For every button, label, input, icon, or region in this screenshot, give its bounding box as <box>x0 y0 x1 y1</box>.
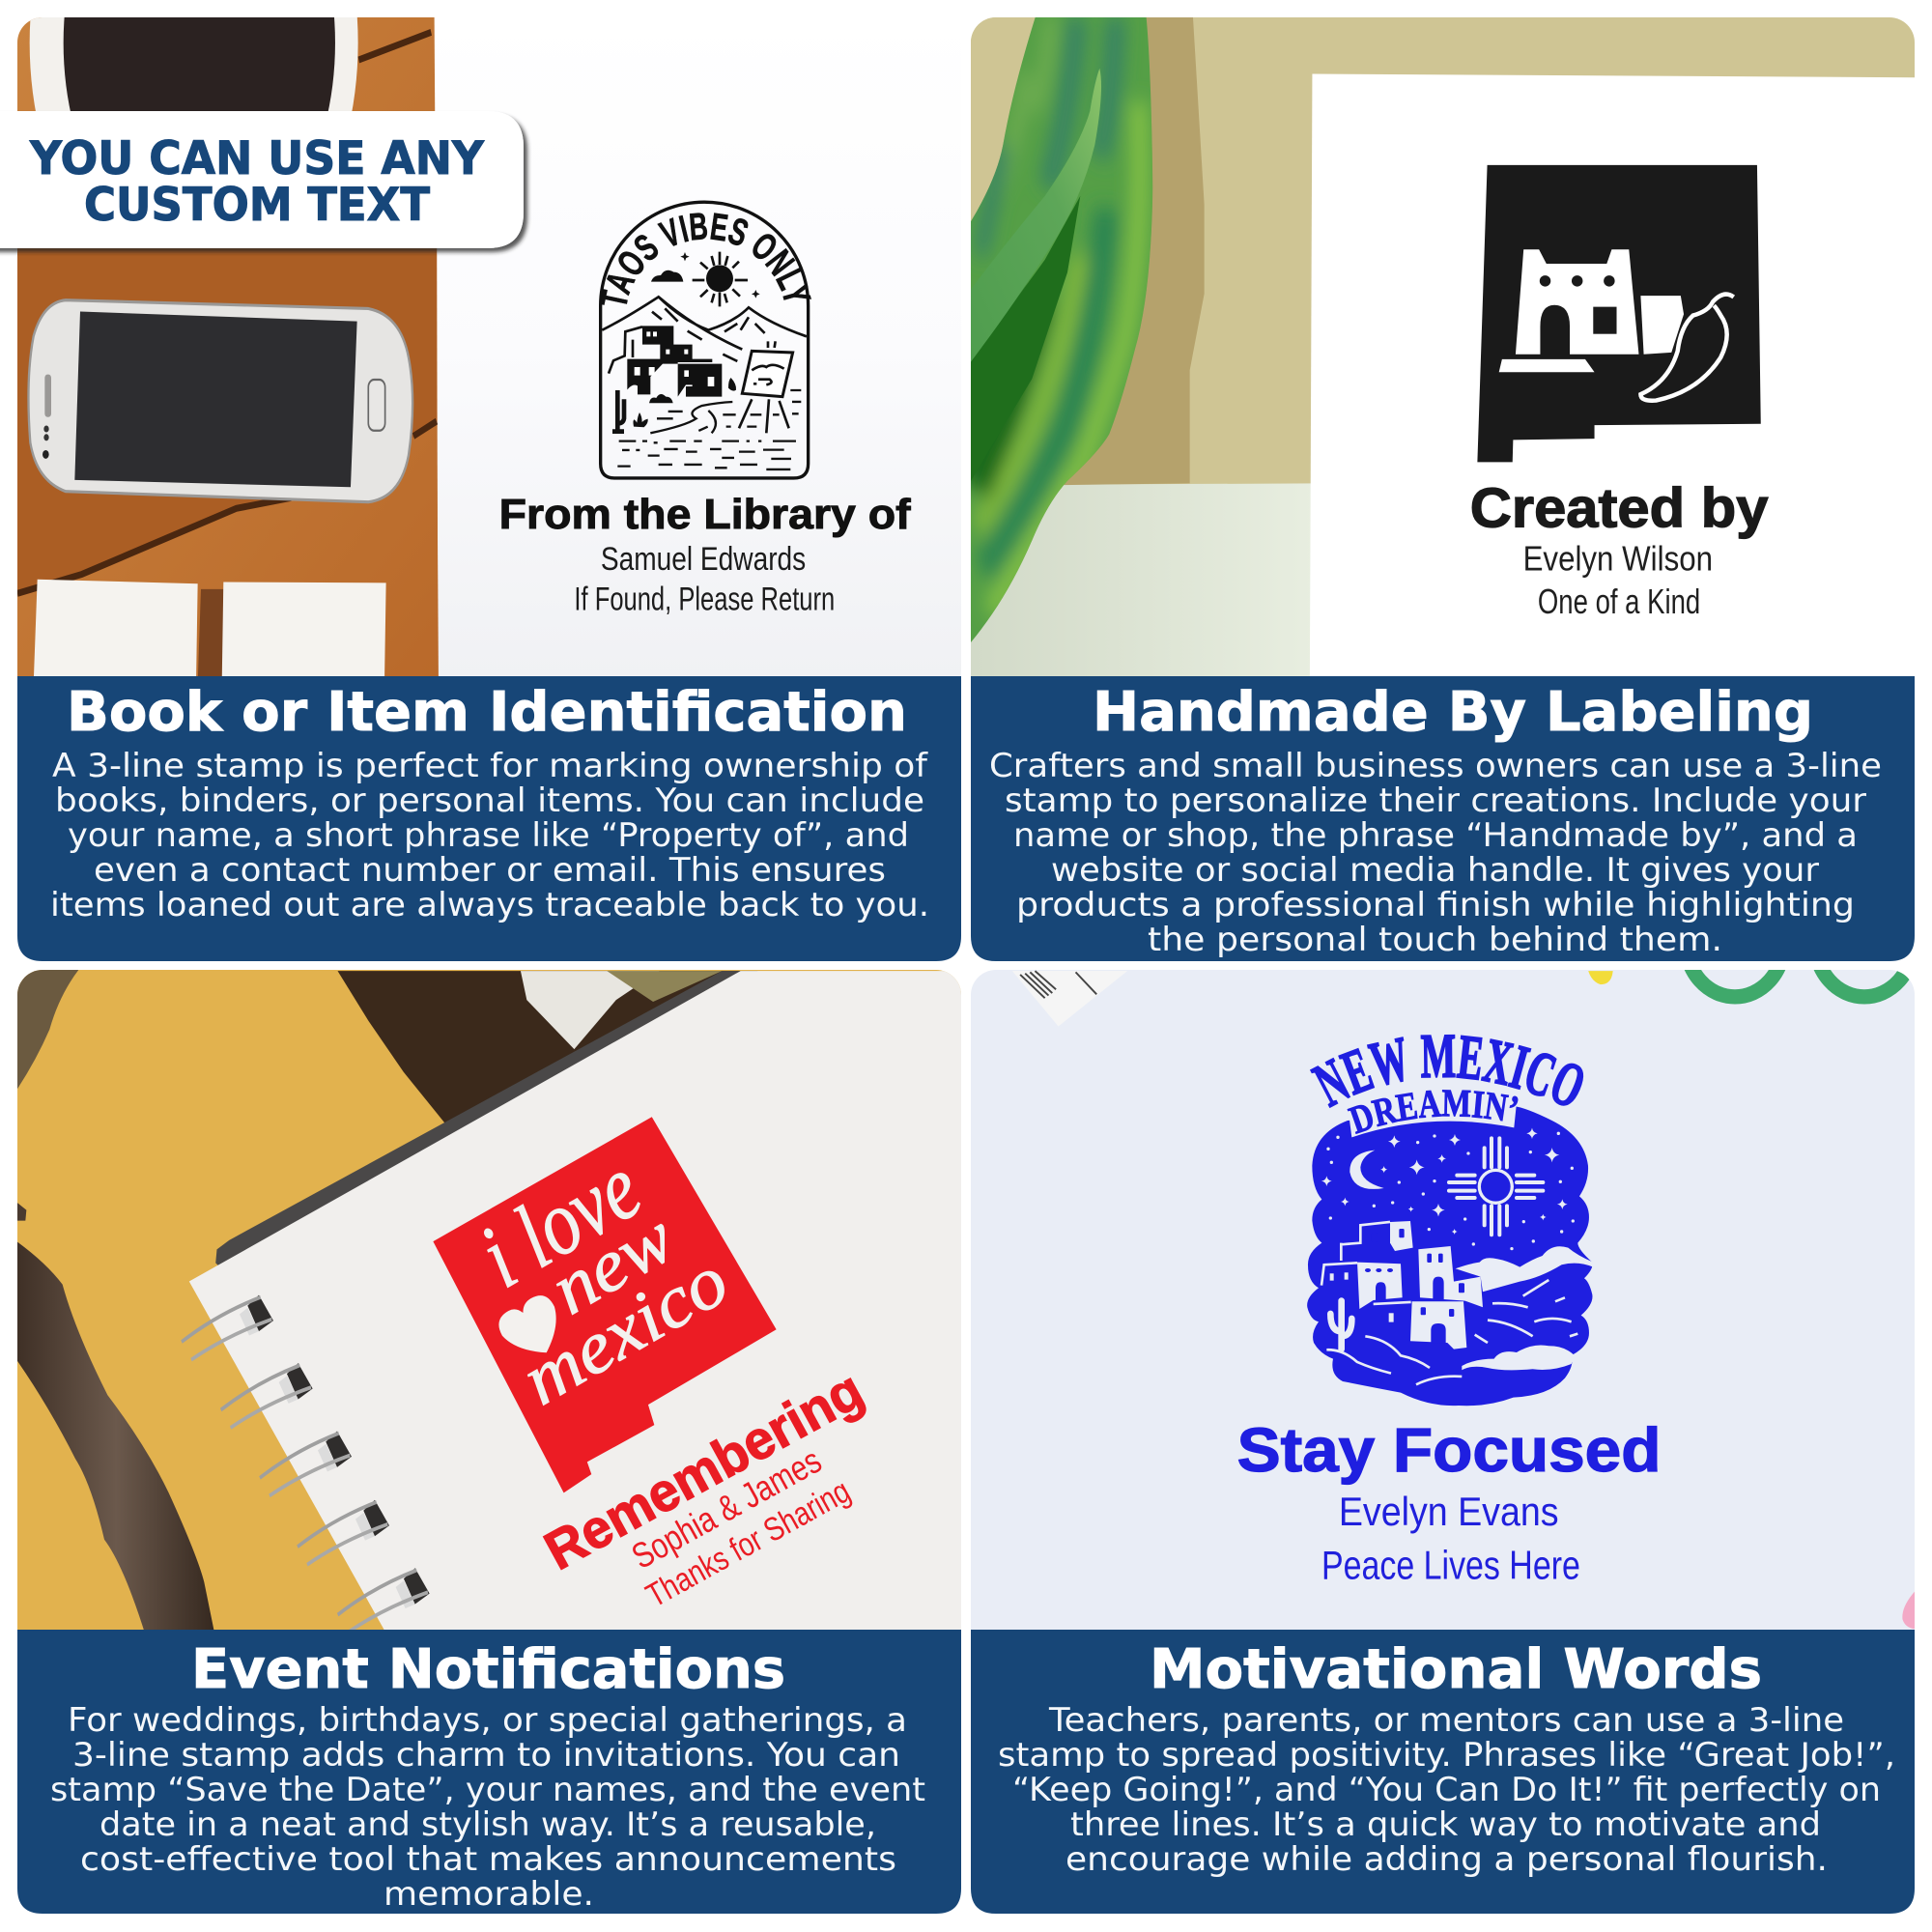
body text: products a professional finish while highlighting <box>1016 886 1855 924</box>
body text <box>50 747 929 924</box>
icon: adobe building <box>1516 249 1638 355</box>
stamp artwork: new mexico dreamin <box>1307 1034 1592 1406</box>
pueblo buildings <box>1321 1221 1483 1350</box>
adobe buildings <box>609 326 736 403</box>
body text: your name, a short phrase like “Property of”, and <box>68 816 909 855</box>
stamp text block: from the library of: If Found, Please Return <box>574 581 835 617</box>
wood desk <box>17 17 439 685</box>
photo: desk with coffee and phone <box>17 0 961 685</box>
icon: new mexico silhouette <box>1477 165 1761 462</box>
backdrop and leaf <box>971 17 1319 685</box>
icon: coffee cup <box>29 17 358 111</box>
photo: blue stamp on pale paper: Evelyn Evans <box>1339 1489 1559 1534</box>
caption bar 3 <box>17 1630 961 1914</box>
panel: book or item identification <box>0 17 961 961</box>
white card <box>1310 74 1932 678</box>
stamp artwork: new mexico dreamin: NEW MEXICO <box>1310 1034 1584 1109</box>
blue scene <box>1307 1106 1593 1406</box>
heading: Event Notifications <box>191 1638 785 1701</box>
stamp text: remembering: Remembering <box>534 1358 873 1581</box>
stamp text block: from the library of: Samuel Edwards <box>601 541 806 578</box>
icon: chili pepper <box>1640 295 1734 401</box>
icon: red new mexico shape <box>433 1117 777 1492</box>
twigs <box>17 970 78 1089</box>
moon, zia sun, stars <box>1321 1128 1573 1249</box>
body text: stamp to spread positivity. Phrases like “Great Job!”, <box>998 1736 1895 1775</box>
photo: leaf and white card <box>971 17 1932 685</box>
photo: blue stamp on pale paper: Peace Lives Here <box>1321 1543 1580 1588</box>
script text: i love new mexico <box>484 1173 724 1406</box>
wood below callout <box>17 248 439 676</box>
notebook page <box>189 971 967 1632</box>
body text: stamp “Save the Date”, your names, and the event <box>50 1771 925 1809</box>
sun and cloud <box>651 252 760 306</box>
body text <box>989 747 1882 959</box>
script text: i love new mexico: i love <box>463 1136 657 1307</box>
body text: three lines. It’s a quick way to motivate and <box>1070 1805 1821 1844</box>
cactus and desert lines <box>612 390 801 469</box>
mountains <box>602 297 807 361</box>
panel: motivational words <box>971 970 1915 1914</box>
script text: i love new mexico: new <box>537 1196 688 1330</box>
stamp text block: from the library of: From the Library of <box>499 492 911 538</box>
stamp text: created by: Created by <box>1470 477 1768 539</box>
body text: Crafters and small business owners can use a 3-line <box>989 747 1882 785</box>
notebook cover <box>215 971 757 1269</box>
caption bar 1 <box>17 676 961 961</box>
body text: date in a neat and stylish way. It’s a reusable, <box>99 1805 876 1844</box>
callout: custom text <box>0 111 524 248</box>
body text: For weddings, birthdays, or special gatherings, a <box>68 1701 907 1740</box>
desk items <box>1012 971 1127 1027</box>
stamp text: stay focused: Stay Focused <box>1237 1415 1661 1485</box>
body text: A 3-line stamp is perfect for marking ownership of <box>52 747 928 785</box>
callout: custom text: CUSTOM TEXT <box>84 179 430 232</box>
easel <box>739 341 793 433</box>
panel: event notifications <box>17 970 967 1914</box>
photo: blue stamp on pale paper <box>971 970 1915 1630</box>
body text: 3-line stamp adds charm to invitations. You can <box>72 1736 900 1775</box>
spiral binding <box>182 1295 430 1633</box>
body text: website or social media handle. It gives your <box>1051 851 1819 890</box>
heading: Motivational Words <box>1150 1638 1762 1701</box>
cactus <box>1330 1301 1351 1350</box>
stamp text block: from the library of <box>499 492 911 617</box>
knit fabric <box>338 971 741 1123</box>
body text: “Keep Going!”, and “You Can Do It!” fit perfectly on <box>1012 1771 1881 1809</box>
body text: stamp to personalize their creations. Include your <box>1005 781 1866 820</box>
photo: leaf and white card: One of a Kind <box>1538 582 1700 621</box>
arched lettering <box>1329 1077 1577 1112</box>
caption bar 2 <box>971 676 1915 961</box>
icon: smartphone <box>28 300 412 502</box>
panel: handmade by labeling <box>971 17 1932 961</box>
caption bar 4 <box>971 1630 1915 1914</box>
body text: cost-effective tool that makes announcements <box>80 1840 896 1879</box>
body text: name or shop, the phrase “Handmade by”, and a <box>1013 816 1858 855</box>
heading: Handmade By Labeling <box>1093 681 1813 744</box>
body text: even a contact number or email. This ensures <box>94 851 886 890</box>
body text <box>50 1701 925 1914</box>
body text: memorable. <box>384 1875 594 1914</box>
body text: books, binders, or personal items. You can include <box>55 781 924 820</box>
photo: spiral notebook on yellow <box>17 970 967 1637</box>
body text: items loaned out are always traceable back to you. <box>50 886 929 924</box>
stamp text: remembering: Thanks for Sharing <box>640 1473 857 1615</box>
stamp text: remembering: Sophia & James <box>625 1440 828 1577</box>
stamp: taos vibes only: TAOS VIBES ONLY <box>602 213 811 305</box>
photo: leaf and white card: Evelyn Wilson <box>1523 540 1713 579</box>
stamp artwork: new mexico dreamin: DREAMIN’ <box>1347 1090 1519 1134</box>
body text <box>998 1701 1895 1879</box>
icon: green leaf <box>971 17 1157 646</box>
body text: Teachers, parents, or mentors can use a 3-line <box>1048 1701 1844 1740</box>
heading: Book or Item Identification <box>67 681 907 744</box>
body text: the personal touch behind them. <box>1148 921 1722 959</box>
body text: encourage while adding a personal flourish. <box>1065 1840 1828 1879</box>
stamp: taos vibes only <box>599 201 811 480</box>
callout text: YOU CAN USE ANY <box>29 132 485 185</box>
script text: i love new mexico: mexico <box>508 1238 741 1421</box>
white cards <box>34 580 198 685</box>
clouds and mountain lines <box>1326 1246 1593 1384</box>
